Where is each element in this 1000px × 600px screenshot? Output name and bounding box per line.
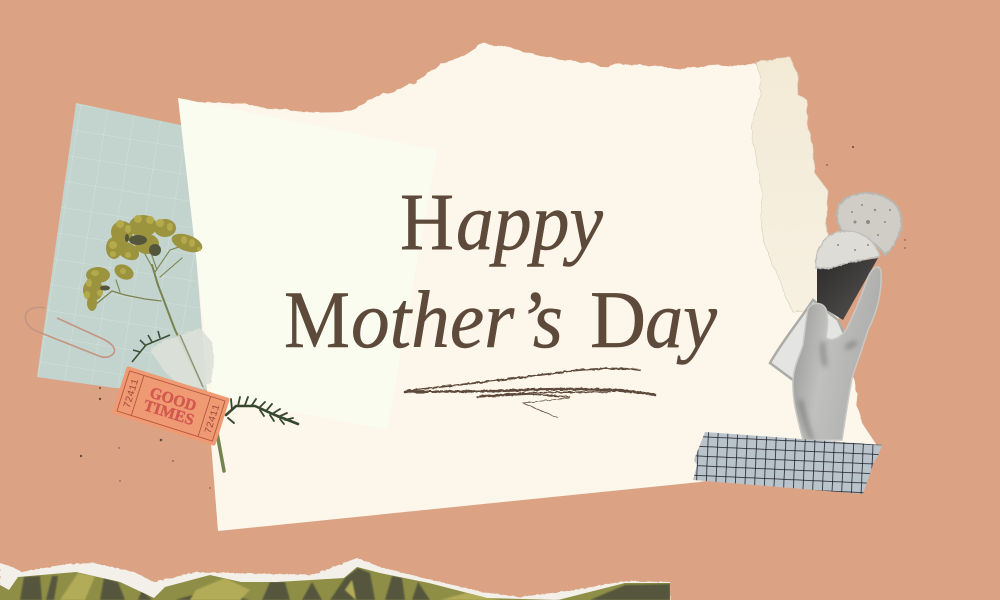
ticket headline: GOOD [148,384,198,415]
ice cream texture [837,204,891,251]
panel: torn paper strip [750,57,827,312]
lower fern sprig [226,397,298,424]
hand shadow [800,342,856,440]
bottom torn landscape strip [0,558,670,600]
paperclip [25,307,115,357]
upper fern sprig [132,331,170,362]
panel: pale overlay sheet [178,98,437,430]
title line: Mother's Day: D [590,274,646,365]
ice cream upper scoop [837,193,901,255]
title line: Happy: appy [456,176,604,267]
hand [793,267,881,440]
ticket number right: 72411 [204,403,223,435]
title [284,176,718,365]
napkin [770,300,845,380]
title line: Mother's Day: ay [645,274,718,365]
speckles [80,146,906,489]
stem over tissue [180,335,203,387]
title line: Mother's Day: other’s [351,274,563,365]
ice cream lower scoop [816,231,880,268]
ticket: good times [112,366,230,446]
ticket number left: 72411 [123,378,142,410]
dried flower heads [83,215,205,311]
title line: Happy: H [400,176,454,267]
hand-drawn underline [405,369,655,418]
washi tape [693,432,882,494]
tissue paper scrap [150,328,214,388]
ticket headline: TIMES [141,397,196,429]
cone [817,258,878,320]
panel: main torn paper [178,43,880,531]
hand holding ice cream [770,193,901,440]
panel: grid note paper [37,103,225,390]
flower stem and branches [95,245,224,471]
title line: Mother's Day: M [284,274,350,365]
